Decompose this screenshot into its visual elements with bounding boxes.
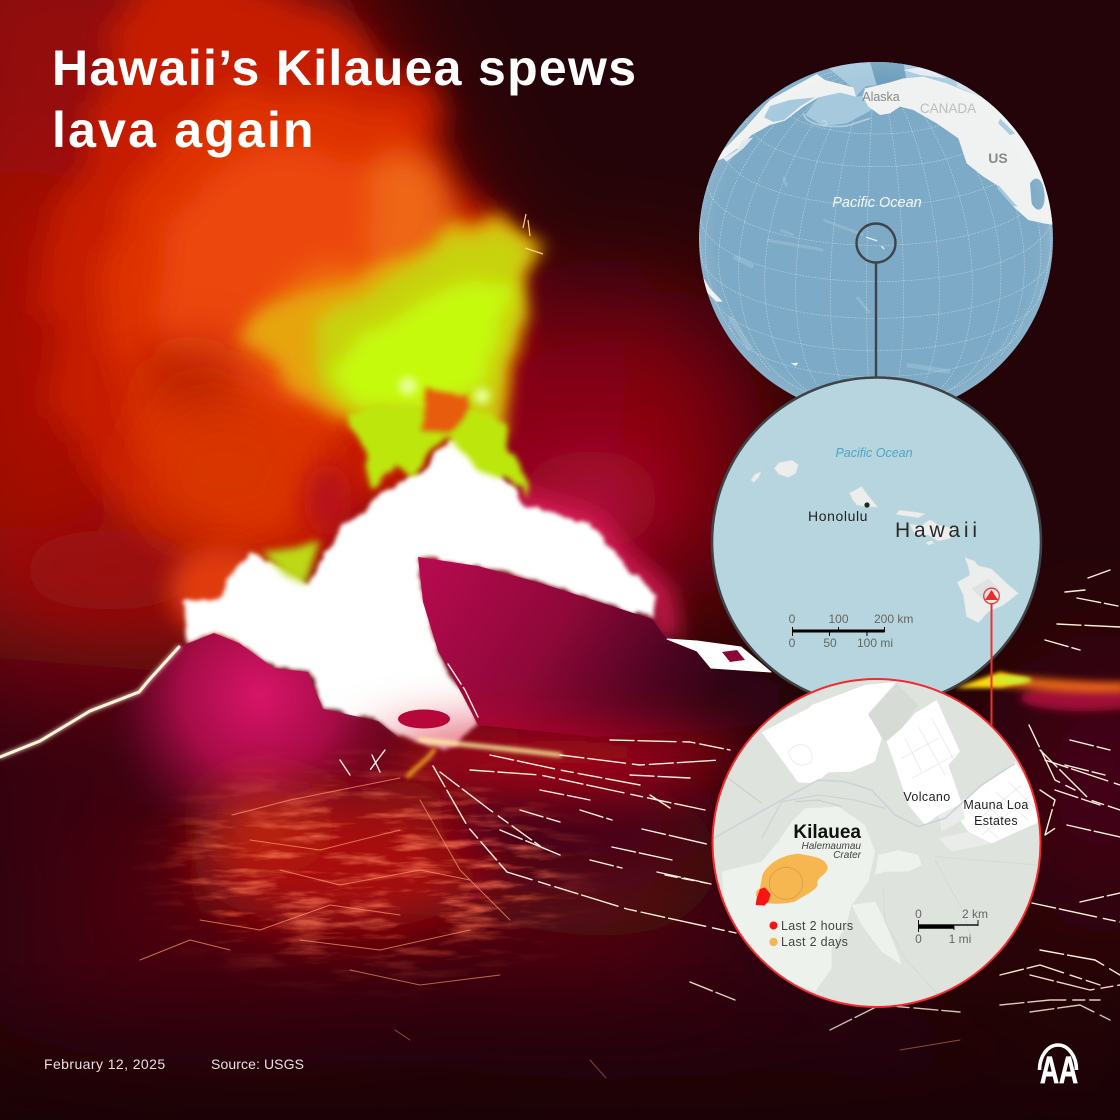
central dark rock [398, 557, 780, 737]
scale bar km/mi: 50 [823, 636, 837, 650]
globe labels [832, 90, 1008, 211]
map labels: Halemaumau [802, 841, 861, 852]
map labels: Estates [974, 814, 1018, 828]
footer source: Source: USGS [211, 1056, 304, 1072]
scale bar km/mi: 0 [789, 636, 796, 650]
legend: Last 2 hours [781, 919, 853, 933]
legend: Last 2 days [781, 935, 848, 949]
left cone [100, 633, 432, 860]
orange hot-spot area [756, 854, 828, 904]
crimson gap beside gas tongue [304, 464, 352, 536]
tiny Hawaii on globe [867, 237, 884, 249]
roads [713, 763, 1015, 838]
lava streams and cracks [0, 570, 1120, 1078]
scale bar km/mi: 100 [828, 612, 849, 626]
footer date: February 12, 2025 [44, 1056, 166, 1072]
map labels: Mauna Loa [963, 798, 1029, 812]
globe labels: US [988, 150, 1008, 166]
local map: Kilauea [712, 679, 1042, 1007]
lava field glow [195, 732, 750, 930]
orange smoke plume [44, 0, 530, 560]
islands [751, 460, 1018, 623]
arctic and continental shelf shading [805, 62, 1006, 126]
scale bar km/mi: 1 mi [949, 932, 971, 946]
AA logo [1040, 1045, 1078, 1092]
red hot-spot area [756, 887, 771, 906]
white-hot fountain [184, 430, 657, 749]
scale bar km/mi: 0 [789, 612, 796, 626]
regional map: Hawaii islands [712, 378, 1041, 706]
scale bar km/mi: 200 km [874, 612, 913, 626]
graticule [700, 66, 1052, 407]
globe labels: Pacific Ocean [832, 195, 922, 211]
scale bar km/mi: 100 mi [857, 636, 893, 650]
right lava stream [955, 672, 1120, 711]
scale bar km/mi: 0 [915, 932, 922, 946]
map labels: Volcano [903, 790, 951, 804]
AA logo: AA [1040, 1050, 1078, 1092]
map labels: Crater [833, 850, 862, 861]
Honolulu marker and label: Honolulu [808, 508, 868, 524]
pale lava flow area [722, 807, 875, 992]
white land parcels [762, 682, 897, 783]
label: Pacific Ocean: Pacific Ocean [835, 446, 913, 460]
smoke shadows and crimson gaps [20, 353, 660, 610]
scale bar km/mi [915, 907, 988, 946]
globe locator map [699, 58, 1057, 416]
land: Asia [710, 74, 856, 163]
scale bar km/mi: 0 [915, 907, 922, 921]
title: Hawaii’s Kilauea spews [52, 40, 637, 96]
globe labels: CANADA [920, 101, 976, 116]
scale bar km/mi [789, 612, 913, 650]
title [52, 40, 637, 158]
lava surface texture [180, 790, 560, 950]
legend [769, 919, 853, 949]
scale bar km/mi: 2 km [962, 907, 988, 921]
globe labels: Alaska [862, 90, 900, 104]
pink glow behind fountain [510, 500, 668, 640]
map labels [793, 790, 1029, 861]
title: lava again [52, 102, 316, 158]
parcel grid lines [788, 718, 1038, 838]
sea-floor tints [730, 177, 950, 372]
yellow-green gas [232, 214, 543, 584]
land: North America [863, 77, 1057, 225]
locator ring and leader line [856, 224, 896, 380]
label: Hawaii: Hawaii [895, 519, 981, 542]
red glow at fountain base [170, 545, 270, 635]
map labels: Kilauea [793, 822, 861, 843]
volcano marker and red leader line [984, 588, 999, 730]
